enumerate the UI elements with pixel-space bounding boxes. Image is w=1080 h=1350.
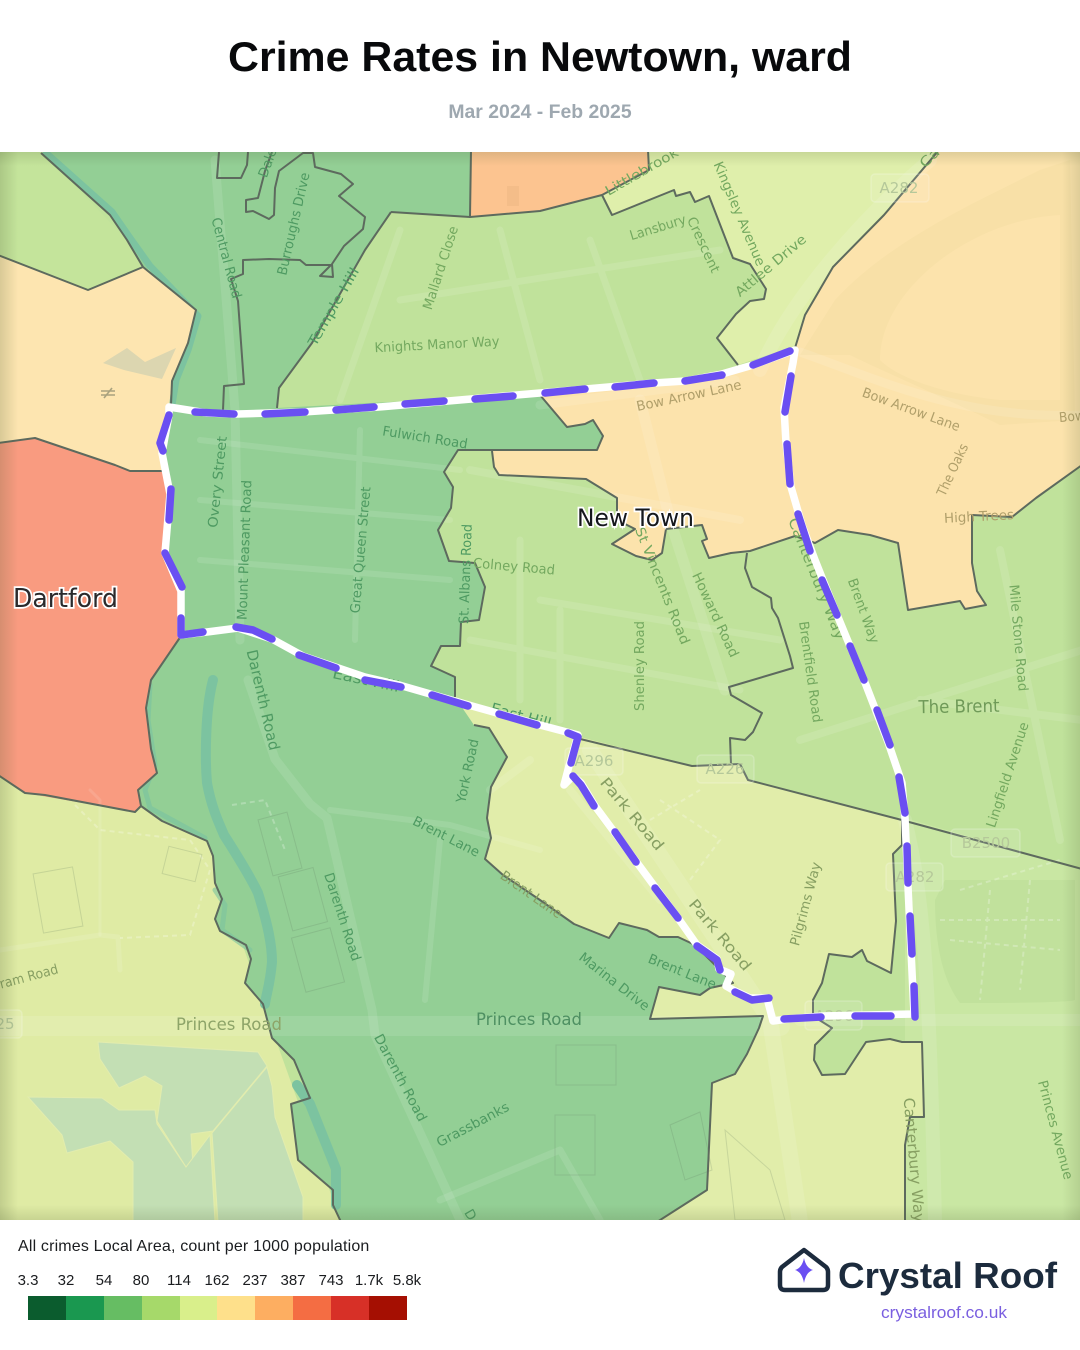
road labels: Bow Arrow Lane xyxy=(860,385,962,435)
zone: raised ground shading xyxy=(800,160,1075,425)
legend value labels: 80 xyxy=(133,1272,149,1289)
zone: top orange xyxy=(470,150,649,217)
road labels: Darenth Road xyxy=(370,1031,430,1125)
road labels: Temple Hill xyxy=(304,265,363,350)
place label: Dartford: Dartford xyxy=(13,584,118,614)
road labels: Park Road xyxy=(685,896,755,974)
road labels: Darenth Road xyxy=(243,648,283,752)
road labels: Marina Drive xyxy=(576,950,652,1014)
legend value labels: 387 xyxy=(280,1272,306,1289)
logo: Crystal Roof xyxy=(778,1248,1058,1322)
legend title: All crimes Local Area, count per 1000 population xyxy=(18,1238,369,1255)
map base: light green zones xyxy=(0,152,1080,1220)
road labels: Shenley Road xyxy=(632,621,648,711)
zone: top pale yellow-green xyxy=(602,150,939,365)
road labels: Great Queen Street xyxy=(347,486,375,614)
road labels: A296 xyxy=(815,1007,853,1025)
road labels: Burroughs Drive xyxy=(274,171,314,277)
road labels: Brent Way xyxy=(844,576,882,646)
legend value labels: 237 xyxy=(242,1272,268,1289)
title: Crime Rates in Newtown, ward xyxy=(228,33,852,80)
icon: railway station xyxy=(101,388,115,398)
map edge vignette xyxy=(0,152,1080,1220)
road labels: Howard Road xyxy=(688,570,742,660)
road labels: A226 xyxy=(706,760,744,778)
road labels: Grassbanks xyxy=(434,1099,512,1151)
road labels: Fulwich Road xyxy=(381,423,469,453)
road labels: East Hill xyxy=(489,699,553,733)
road labels: Canterbury Way xyxy=(784,516,848,643)
road labels: Overy Street xyxy=(205,435,231,529)
zone: west station pale orange xyxy=(0,255,196,471)
road labels: Colney Road xyxy=(472,555,556,579)
zone: central green xyxy=(41,150,763,1222)
road labels: Mount Pleasant Road xyxy=(235,480,255,620)
road labels: The Oaks xyxy=(934,441,972,500)
road labels: Crescent xyxy=(683,214,723,276)
zone: south-east light green xyxy=(905,818,1080,1222)
legend value labels: 162 xyxy=(204,1272,230,1289)
road labels: East Hill xyxy=(331,664,401,696)
road labels: Darenth Road xyxy=(320,871,364,963)
road labels: Bow Arrow Lane xyxy=(635,377,743,415)
lakes xyxy=(28,1042,303,1222)
road labels: The Brent xyxy=(917,696,1000,718)
road labels: Mallard Close xyxy=(420,224,462,312)
icon: house with star xyxy=(780,1250,828,1290)
legend swatches xyxy=(28,1296,407,1320)
zone: south pale yellow xyxy=(455,697,924,1222)
zone: lower-left pale yellow-green xyxy=(0,775,341,1222)
road labels: York Road xyxy=(453,738,483,805)
road labels: Brent Lane xyxy=(497,868,565,922)
road labels: Brent Lane xyxy=(646,951,718,993)
road labels: Kingsley Avenue xyxy=(710,159,768,269)
zone: business park block xyxy=(935,880,1075,1003)
legend value labels xyxy=(18,1272,422,1289)
road labels: Lansbury xyxy=(628,212,688,244)
road labels: Lingfield Avenue xyxy=(983,720,1033,830)
road labels: Canterbury Way xyxy=(900,1097,928,1220)
road labels: B2500 xyxy=(962,834,1010,852)
road labels: Attlee Drive xyxy=(732,232,810,300)
road labels: St. Albans Road xyxy=(456,524,476,624)
road labels: Brentfield Road xyxy=(795,620,825,724)
road labels: A282 xyxy=(896,868,934,886)
legend value labels: 743 xyxy=(318,1272,344,1289)
legend value labels: 32 xyxy=(58,1272,74,1289)
road labels: Princes Avenue xyxy=(1034,1079,1076,1181)
zone: New Town and east pale orange xyxy=(492,150,1080,610)
legend value labels: 5.8k xyxy=(393,1272,422,1289)
road labels: A282 xyxy=(880,179,918,197)
legend value labels: 114 xyxy=(167,1272,191,1289)
zone boundaries xyxy=(0,150,1080,1222)
ward boundary white line xyxy=(162,350,914,1021)
road shields xyxy=(0,174,1020,1038)
colour legend xyxy=(18,1272,422,1320)
map panel xyxy=(0,152,1080,1220)
ward boundary purple dashes xyxy=(160,351,915,1019)
road labels: Princes Road xyxy=(476,1010,582,1030)
zone: top-left light green xyxy=(0,150,143,290)
paths and pitches xyxy=(75,790,1060,1000)
road labels: St Vincents Road xyxy=(631,525,693,647)
place label: New Town: New Town xyxy=(577,504,694,532)
road labels: High Trees xyxy=(944,507,1014,527)
logo wordmark: Crystal Roof xyxy=(838,1255,1058,1296)
logo url: crystalroof.co.uk xyxy=(881,1304,1008,1322)
road labels: Pilgrims Way xyxy=(787,860,825,948)
road labels: Princes Road xyxy=(176,1015,282,1035)
road labels: A296 xyxy=(575,752,613,770)
road labels: Mile Stone Road xyxy=(1005,584,1031,692)
rivers xyxy=(46,153,336,1205)
road labels: Knights Manor Way xyxy=(374,334,500,356)
legend value labels: 3.3 xyxy=(18,1272,38,1289)
subtitle: date range: Mar 2024 - Feb 2025 xyxy=(448,101,632,123)
road labels: Central Road xyxy=(208,216,244,300)
road network xyxy=(0,160,1080,1222)
road labels xyxy=(0,144,1080,1224)
legend value labels: 1.7k xyxy=(355,1272,384,1289)
road labels: Park Road xyxy=(596,774,668,854)
zone: Dartford red xyxy=(0,438,181,812)
legend value labels: 54 xyxy=(96,1272,112,1289)
road labels: Brent Lane xyxy=(410,813,482,861)
